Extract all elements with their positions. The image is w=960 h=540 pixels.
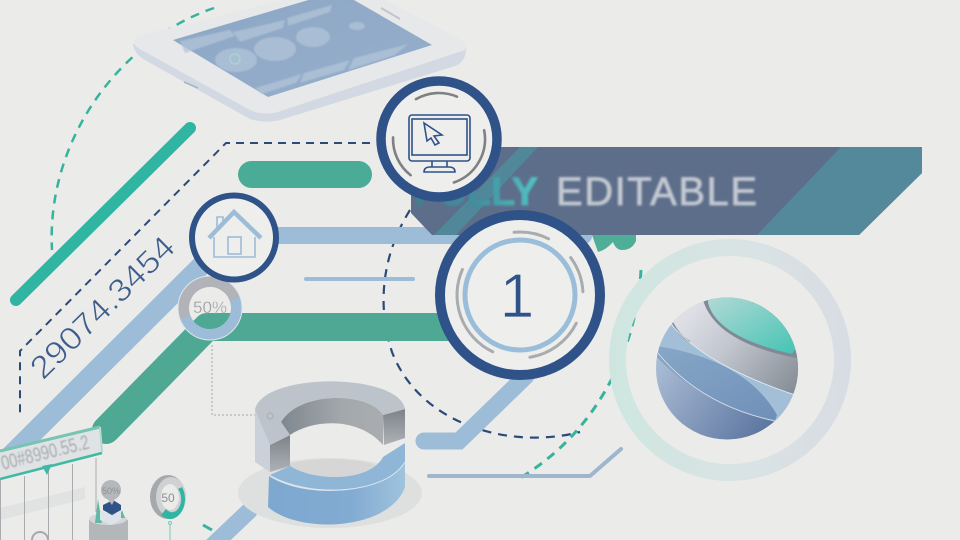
gauge label: 50 — [161, 491, 175, 505]
icon: monitor with cursor — [409, 115, 470, 172]
teal dashed arc left — [52, 8, 214, 250]
sphere — [656, 298, 798, 440]
3D ring chart — [238, 381, 422, 528]
inner blue ring — [465, 240, 575, 350]
navy dashed leader line — [20, 143, 370, 416]
lower ring side — [268, 462, 405, 524]
teal dashed arc right — [520, 270, 641, 478]
pedestal with house — [89, 480, 128, 540]
tree shapes — [95, 499, 102, 523]
blue thin line — [304, 277, 415, 281]
blue connector lower right — [424, 376, 526, 441]
value tag — [0, 427, 102, 479]
dotted connector — [212, 345, 268, 415]
number reading 29074.3454: 29074.3454 — [23, 229, 182, 386]
green scalloped shape behind ribbon — [592, 235, 636, 252]
small donut gauge — [150, 475, 186, 540]
green pill — [238, 161, 372, 188]
50 percent donut — [176, 274, 244, 342]
blue connector horizontal — [265, 227, 592, 244]
thin blue line bottom right — [429, 449, 621, 476]
tablet — [133, 0, 466, 122]
small house — [100, 510, 121, 525]
pin — [101, 480, 121, 500]
circular ring around sphere — [618, 248, 842, 472]
gray arc segments — [432, 207, 608, 383]
upper ring left side — [255, 410, 270, 472]
upper ring left cut — [270, 435, 290, 472]
gray arcs — [374, 74, 504, 204]
vertical guide lines — [0, 458, 96, 540]
navy dashed arc around step one — [384, 210, 580, 438]
step one circle — [432, 207, 608, 383]
tag text: 00#8990.55.2 — [0, 432, 92, 475]
ribbon banner — [411, 147, 922, 235]
bottom left gray bands — [0, 487, 85, 520]
upper ring inner wall — [281, 398, 383, 445]
ribbon text: EDITABLE — [556, 170, 757, 214]
pin label: 50% — [102, 486, 120, 496]
blue connector bottom — [210, 511, 249, 540]
step number: 1 — [500, 262, 534, 331]
ribbon text: FULLY — [414, 170, 538, 214]
upper ring right cut — [383, 409, 405, 445]
green connector — [106, 327, 450, 430]
house circle — [192, 196, 276, 280]
dotted connector node — [267, 413, 273, 419]
blue diagonal connector — [0, 253, 214, 470]
icon: house — [209, 212, 261, 257]
upper ring top surface — [255, 381, 405, 445]
chart shadow — [238, 458, 422, 528]
teal diagonal bar — [16, 128, 190, 300]
donut label: 50% — [193, 298, 227, 317]
tablet screen shapes — [180, 5, 408, 94]
teal dash bottom — [203, 525, 212, 530]
monitor circle — [374, 74, 504, 204]
lower ring top — [270, 443, 405, 490]
small gauge — [32, 532, 48, 540]
